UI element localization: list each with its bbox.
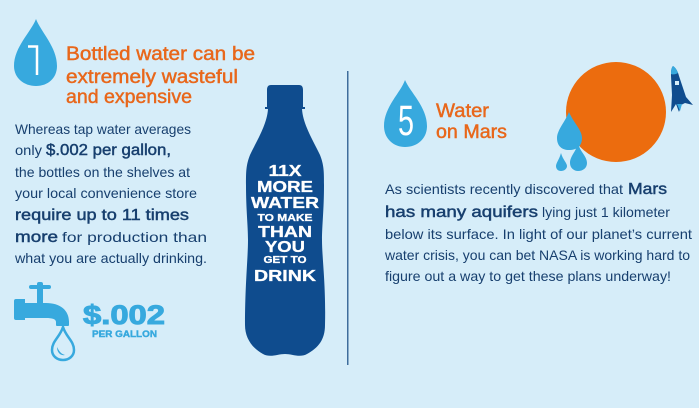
text block: mars aquifers: water crisis, you can bet NASA is working hard to <box>384 247 690 263</box>
bottle text: DRINK <box>254 268 317 285</box>
heading: water on mars <box>436 101 507 143</box>
text block: tap water comparison: Whereas tap water averages <box>15 121 191 137</box>
text block: mars aquifers <box>384 181 692 284</box>
bottle text <box>251 163 320 285</box>
heading: water on mars: on Mars <box>436 122 507 143</box>
text block: mars aquifers: Mars <box>628 181 667 198</box>
bottle text: MORE <box>257 179 313 196</box>
icon: water drop number 5: 5 <box>398 97 414 145</box>
text block: tap water comparison: the bottles on the shelves at <box>15 164 190 180</box>
price label: $.002 <box>83 300 165 330</box>
text block: tap water comparison: your local convenience store <box>15 185 197 201</box>
price label <box>83 300 165 339</box>
bottle text: GET TO <box>264 255 307 266</box>
illustration: mars planet <box>566 62 666 162</box>
heading: bottled water: extremely wasteful <box>66 67 238 88</box>
bottle text: TO MAKE <box>258 213 313 224</box>
illustration: rocket <box>671 66 693 112</box>
text block: mars aquifers: As scientists recently discovered that <box>385 181 623 197</box>
bottle text: WATER <box>251 195 320 212</box>
icon: water drop number 1 <box>14 19 57 86</box>
illustration: water drops on mars <box>556 112 587 171</box>
text block: tap water comparison: require up to 11 times <box>15 207 189 224</box>
bottle text: YOU <box>265 239 305 256</box>
text block: tap water comparison: more <box>15 229 58 246</box>
text block: mars aquifers: has many aquifers <box>385 204 538 221</box>
heading: water on mars: Water <box>436 101 490 122</box>
icon: water drop number 5 <box>384 80 427 147</box>
price label: PER GALLON <box>92 329 157 339</box>
text block: tap water comparison: what you are actually drinking. <box>14 250 207 266</box>
text block: mars aquifers: figure out a way to get these plans underway! <box>385 268 671 284</box>
text block: mars aquifers: lying just 1 kilometer <box>542 204 670 220</box>
heading: bottled water: and expensive <box>66 87 192 108</box>
bottle text: THAN <box>258 224 312 241</box>
text block: tap water comparison: only <box>15 142 42 158</box>
text block: mars aquifers: below its surface. In light of our planet’s current <box>385 226 692 242</box>
text block: tap water comparison <box>14 121 207 266</box>
heading: bottled water <box>66 44 255 108</box>
bottle text: 11X <box>268 163 302 180</box>
text block: tap water comparison: $.002 per gallon, <box>46 142 171 159</box>
icon: faucet with drop <box>14 282 74 360</box>
text block: tap water comparison: for production than <box>62 229 207 245</box>
divider <box>347 71 348 365</box>
heading: bottled water: Bottled water can be <box>66 44 255 65</box>
bottle <box>245 85 325 356</box>
